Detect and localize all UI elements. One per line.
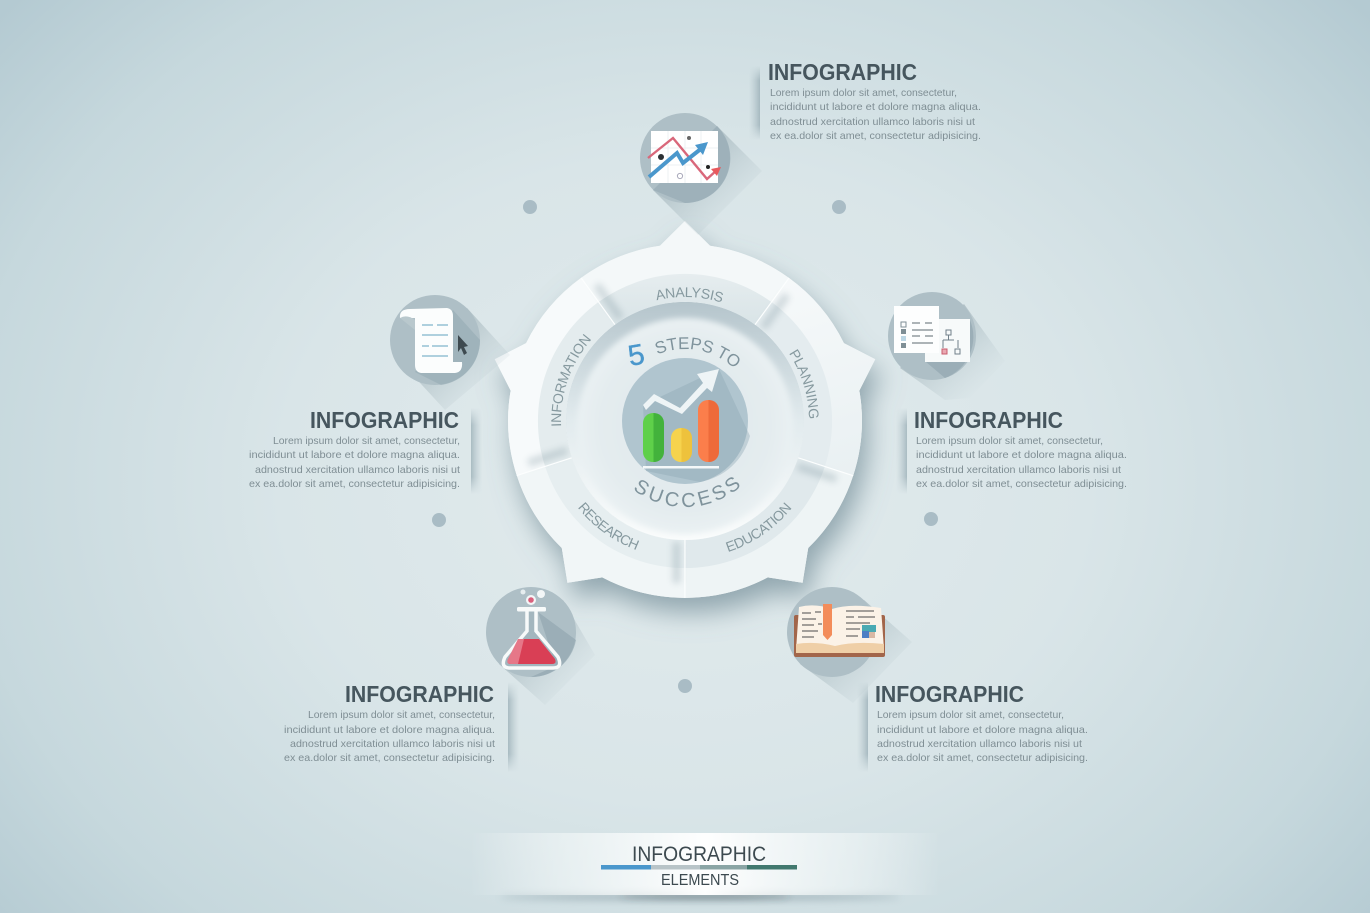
segment labels: ANALYSIS — [656, 287, 723, 302]
text block: top: adnostrud xercitation ullamco laboris nisi ut — [770, 116, 975, 128]
text block: top: INFOGRAPHIC — [768, 59, 917, 85]
central wheel — [492, 221, 890, 628]
segment labels: EDUCATION — [726, 502, 792, 552]
text block: left: INFOGRAPHIC — [310, 407, 459, 433]
text block: bottom left: incididunt ut labore et dolore magna aliqua. — [284, 724, 495, 736]
center icon: bar chart with arrow — [622, 358, 750, 484]
text block: left: Lorem ipsum dolor sit amet, consectetur, — [273, 435, 460, 447]
text block: right: INFOGRAPHIC — [914, 407, 1063, 433]
text block: left: ex ea.dolor sit amet, consectetur adipisicing. — [249, 478, 460, 490]
text block: right — [896, 407, 1127, 494]
text block: bottom right: Lorem ipsum dolor sit amet, consectetur, — [877, 709, 1064, 721]
segment: planning — [744, 260, 907, 490]
text block: right: ex ea.dolor sit amet, consectetur adipisicing. — [916, 478, 1127, 490]
segment edge shadows — [517, 278, 853, 598]
baseline — [643, 466, 719, 468]
text block: bottom right: INFOGRAPHIC — [875, 681, 1024, 707]
arrow — [643, 369, 719, 414]
text block: left: adnostrud xercitation ullamco laboris nisi ut — [255, 464, 460, 476]
segment: research — [483, 438, 713, 644]
wheel base with star points — [463, 221, 907, 644]
segment: analysis — [581, 221, 789, 325]
step: analysis chart icon — [640, 113, 762, 235]
bars — [643, 413, 664, 462]
text block: bottom left: ex ea.dolor sit amet, consectetur adipisicing. — [284, 752, 495, 764]
text block: right: Lorem ipsum dolor sit amet, consectetur, — [916, 435, 1103, 447]
text block: bottom right: adnostrud xercitation ullamco laboris nisi ut — [877, 738, 1082, 750]
text block: right: adnostrud xercitation ullamco laboris nisi ut — [916, 464, 1121, 476]
text block: right: incididunt ut labore et dolore magna aliqua. — [916, 449, 1127, 461]
segment labels: PLANNING — [790, 349, 819, 418]
segment labels — [551, 287, 819, 552]
inner disc — [566, 302, 804, 540]
text block: top — [749, 59, 981, 142]
center heading: 5 steps to — [626, 337, 740, 373]
banner subtitle: ELEMENTS — [661, 872, 739, 889]
segment: education — [657, 438, 887, 644]
segment labels: INFORMATION — [551, 334, 591, 426]
text block: left: incididunt ut labore et dolore magna aliqua. — [249, 449, 460, 461]
step: information document icon — [390, 295, 510, 410]
step: planning documents icon — [888, 292, 1005, 400]
text block: bottom left — [284, 681, 519, 772]
segment labels: RESEARCH — [578, 502, 639, 550]
step: education book icon — [787, 587, 912, 703]
decorative dots — [432, 200, 938, 693]
banner color bar — [601, 865, 797, 870]
text block: bottom left: INFOGRAPHIC — [345, 681, 494, 707]
text block: bottom right: ex ea.dolor sit amet, consectetur adipisicing. — [877, 752, 1088, 764]
text block: top: ex ea.dolor sit amet, consectetur adipisicing. — [770, 130, 981, 142]
segment: information — [463, 260, 626, 490]
step: research flask icon — [486, 587, 595, 705]
bottom banner — [470, 833, 940, 900]
text block: top: Lorem ipsum dolor sit amet, consectetur, — [770, 87, 957, 99]
text block: bottom left: adnostrud xercitation ullamco laboris nisi ut — [290, 738, 495, 750]
center heading: 5 steps to: STEPS TO — [656, 337, 740, 366]
text block: bottom right — [857, 681, 1088, 772]
long shadow — [643, 369, 750, 482]
center text: success: SUCCESS — [634, 477, 740, 508]
text block: left — [249, 407, 482, 494]
banner title: INFOGRAPHIC — [632, 843, 766, 866]
text block: top: incididunt ut labore et dolore magna aliqua. — [770, 101, 981, 113]
text block: bottom right: incididunt ut labore et dolore magna aliqua. — [877, 724, 1088, 736]
text block: bottom left: Lorem ipsum dolor sit amet, consectetur, — [308, 709, 495, 721]
center heading: 5 steps to: 5 — [626, 339, 647, 373]
